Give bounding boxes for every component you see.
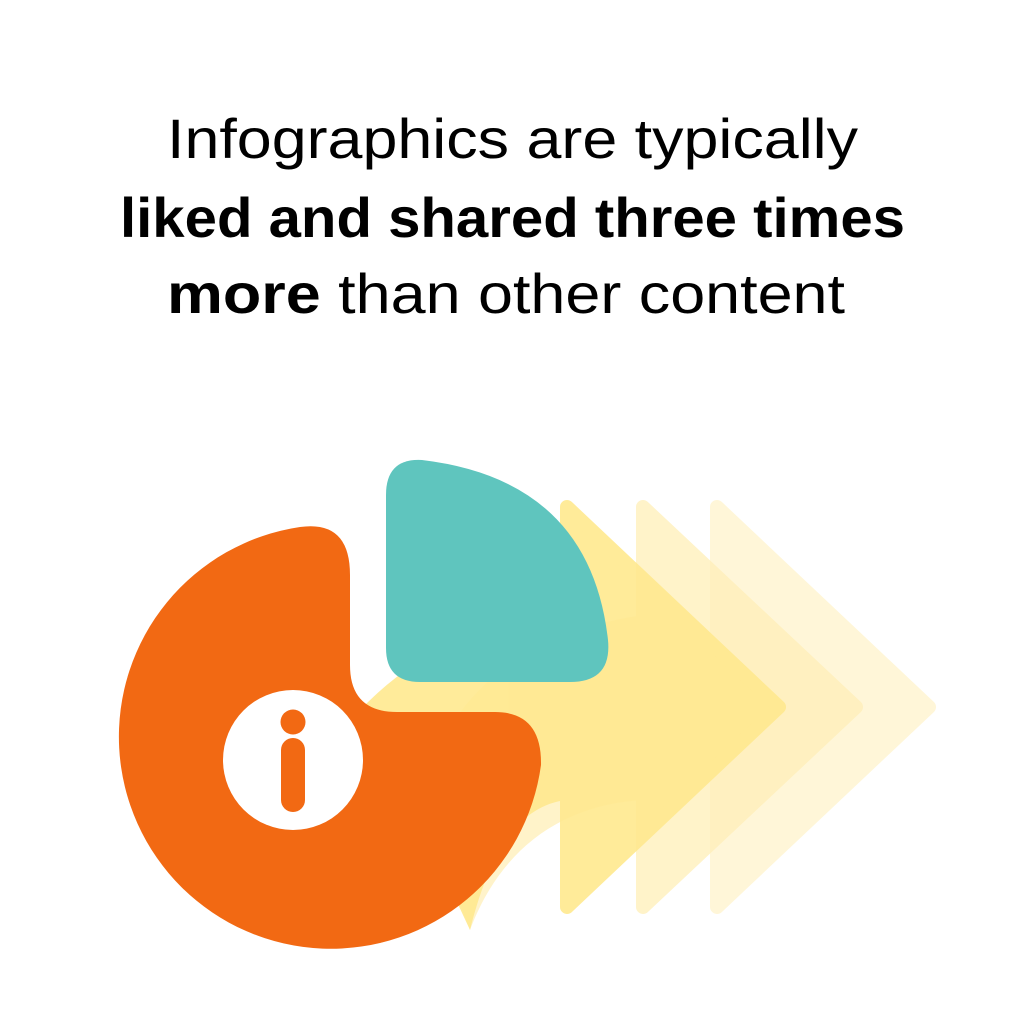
title: Infographics are typically xyxy=(167,107,858,170)
title: liked and shared three times xyxy=(120,186,905,249)
title xyxy=(120,107,905,325)
title: more than other content xyxy=(167,262,845,325)
teal quarter pie xyxy=(386,460,608,682)
orange three-quarter pie xyxy=(119,526,541,949)
arrow 1 front xyxy=(365,507,779,930)
arrow 2 middle xyxy=(420,507,856,930)
icon: info circle xyxy=(223,690,363,830)
arrow 3 back xyxy=(717,507,929,907)
arrows: faded chevrons xyxy=(365,507,929,930)
